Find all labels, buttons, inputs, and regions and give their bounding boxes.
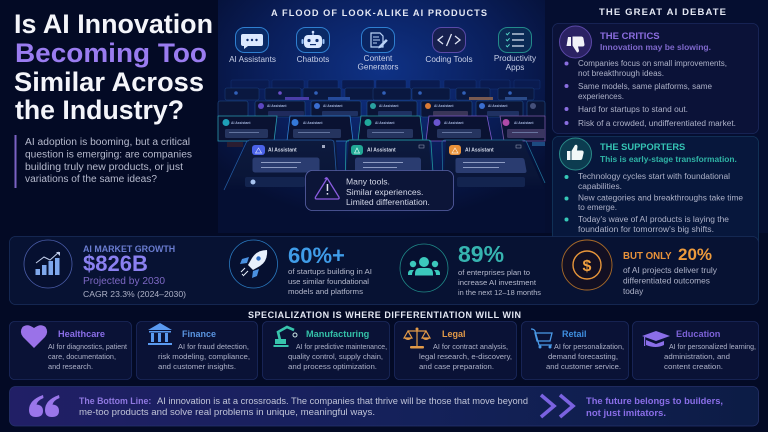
title: Becoming Too xyxy=(15,38,207,68)
second row of product cards: AI Assistant xyxy=(303,121,323,125)
label: content generators: Content xyxy=(364,54,393,63)
panel: healthcare: Healthcare xyxy=(58,329,105,339)
panel: legal xyxy=(394,322,516,380)
stat: only 20%: today xyxy=(623,286,644,296)
third row of product cards: AI Assistant xyxy=(434,104,454,108)
panel: the critics: THE CRITICS xyxy=(600,31,660,42)
panel: healthcare: care, documentation, xyxy=(48,352,116,361)
icon: content generators xyxy=(362,28,394,52)
panel: retail: AI for personalization, xyxy=(554,342,624,351)
stat: 60% startups: models and platforms xyxy=(288,287,363,296)
panel: legal: AI for contract analysis, xyxy=(433,342,508,351)
stat: 89% enterprises: of enterprises plan to xyxy=(458,268,530,277)
icon: chatbots xyxy=(296,28,330,52)
icon: chevrons xyxy=(541,395,573,417)
panel: the supporters: foundation for tomorrow's big shifts. xyxy=(578,225,714,234)
stat: 60% startups: of startups building in AI xyxy=(288,267,372,276)
panel: education: content creation. xyxy=(664,362,723,371)
icon: heart xyxy=(21,325,47,348)
third row of product cards: AI Assistant xyxy=(267,104,287,108)
icon: cart xyxy=(531,329,552,348)
intro text block: variations of the same ideas? xyxy=(25,174,157,185)
stat: 89% enterprises: in the next 12–18 months xyxy=(458,288,541,297)
heading: debate: THE GREAT AI DEBATE xyxy=(599,7,726,18)
panel: retail: demand forecasting, xyxy=(548,352,618,361)
front product card: teal xyxy=(345,140,433,190)
panel: finance xyxy=(136,322,258,380)
back rows of look-alike product cards xyxy=(225,80,540,100)
panel: the bottom line: me-too products and solve real problems in unique, meaningful ways. xyxy=(79,406,375,417)
panel: legal: and case preparation. xyxy=(419,362,494,371)
stat: 60% startups: use similar foundational xyxy=(288,277,369,286)
panel: manufacturing xyxy=(262,322,390,380)
panel: manufacturing: Manufacturing xyxy=(306,329,369,339)
panel: finance: and customer insights. xyxy=(158,362,236,371)
label: chatbots: Chatbots xyxy=(297,55,329,64)
callout: many tools: Similar experiences. xyxy=(346,187,423,197)
panel: finance: risk modeling, compliance, xyxy=(158,352,250,361)
stat: AI market growth: CAGR 23.3% (2024–2030) xyxy=(83,289,186,299)
intro text block: question is emerging: are companies xyxy=(25,150,192,160)
label: AI assistants: AI Assistants xyxy=(229,55,276,64)
panel: education xyxy=(632,322,758,380)
panel: the supporters: Technology cycles start with foundational xyxy=(578,172,730,181)
icon: robot arm xyxy=(274,327,297,347)
panel: education: AI for personalized learning, xyxy=(669,342,756,351)
panel: product flood background xyxy=(218,0,545,233)
heading: flood of products: A FLOOD OF LOOK-ALIKE AI PRODUCTS xyxy=(271,8,487,18)
second row of product cards: AI Assistant xyxy=(231,121,251,125)
second row of product cards: AI Assistant xyxy=(375,121,395,125)
front product card: teal: AI Assistant xyxy=(367,148,396,154)
second row of product cards: AI Assistant xyxy=(444,121,464,125)
label: content generators xyxy=(358,54,398,72)
icon: warning triangle xyxy=(315,178,339,199)
panel: the supporters xyxy=(552,136,758,246)
label: productivity apps: Apps xyxy=(506,63,524,72)
stat: 60% startups xyxy=(230,240,372,296)
panel: healthcare: and research. xyxy=(48,362,93,371)
title xyxy=(14,9,213,125)
panel: the supporters: New categories and breakthroughs take time xyxy=(578,194,744,202)
callout: many tools: Limited differentiation. xyxy=(346,197,430,207)
panel: finance: AI for fraud detection, xyxy=(178,342,249,351)
panel: debate background xyxy=(545,0,768,233)
stat: AI market growth: Projected by 2030 xyxy=(83,276,165,287)
front product card: blue xyxy=(224,140,339,190)
icon: AI assistants xyxy=(236,28,268,52)
panel: manufacturing: and process optimization. xyxy=(288,362,377,371)
panel: the bottom line: The future belongs to builders, xyxy=(586,396,723,406)
panel: the critics: Hard for startups to stand out. xyxy=(578,105,688,114)
front product card: orange xyxy=(442,140,545,190)
title: Is AI Innovation xyxy=(14,9,213,39)
stat: only 20%: differentiated outcomes xyxy=(623,276,710,286)
panel: education: Education xyxy=(676,329,721,339)
second row of product cards xyxy=(218,116,545,147)
icon: graduation cap xyxy=(642,331,670,347)
stat: 89% enterprises: 89% xyxy=(458,241,504,267)
intro text block: AI adoption is booming, but a critical xyxy=(25,137,190,148)
stat: 89% enterprises: increase AI investment xyxy=(458,278,537,287)
callout: many tools xyxy=(306,170,454,210)
third row of product cards: AI Assistant xyxy=(488,104,508,108)
panel: legal: legal research, e-discovery, xyxy=(419,352,512,361)
stat: only 20%: BUT ONLY xyxy=(623,251,672,262)
panel: manufacturing: AI for predictive maintenance, xyxy=(296,342,387,351)
panel: the bottom line: The Bottom Line: xyxy=(79,396,151,406)
panel: the supporters: This is early-stage transformation. xyxy=(600,154,737,164)
panel: the critics: not breakthrough ideas. xyxy=(578,69,664,78)
panel: the critics xyxy=(552,24,758,134)
title: Similar Across xyxy=(14,67,204,97)
stat: only 20% xyxy=(562,240,718,296)
icon: quotation marks xyxy=(29,395,60,417)
stat: AI market growth: $826B xyxy=(83,251,148,276)
icon: coding tools xyxy=(432,28,466,52)
panel: the critics: Risk of a crowded, undifferentiated market. xyxy=(578,119,736,128)
panel: market statistics xyxy=(10,236,758,304)
panel: legal: Legal xyxy=(442,329,466,339)
icon: productivity apps xyxy=(498,28,532,52)
panel: healthcare: AI for diagnostics, patient xyxy=(48,342,127,351)
panel: the supporters: THE SUPPORTERS xyxy=(600,142,685,152)
callout: many tools: Many tools. xyxy=(346,176,390,186)
label: content generators: Generators xyxy=(358,62,398,72)
panel: the bottom line xyxy=(10,386,758,426)
panel: the critics: Same models, same platforms, same xyxy=(578,82,713,91)
panel: the critics: experiences. xyxy=(578,92,624,101)
front product card: blue: AI Assistant xyxy=(268,148,297,154)
icon: thumbs down xyxy=(560,26,592,58)
panel: the supporters: capabilities. xyxy=(578,182,622,191)
third row of product cards xyxy=(218,101,545,117)
icon: scales xyxy=(404,328,430,348)
stat: AI market growth xyxy=(24,240,186,299)
panel: manufacturing: quality control, supply chain, xyxy=(288,352,383,361)
intro text block: building truly new products, or just xyxy=(25,162,183,173)
panel: the critics: Companies focus on small improvements, xyxy=(578,59,727,68)
front product card: orange: AI Assistant xyxy=(465,148,494,154)
second row of product cards: AI Assistant xyxy=(514,121,534,125)
icon: bank xyxy=(148,323,172,345)
third row of product cards: AI Assistant xyxy=(323,104,343,108)
icon: thumbs up xyxy=(560,138,592,170)
stat: AI market growth: AI MARKET GROWTH xyxy=(83,244,175,254)
title: the Industry? xyxy=(15,95,184,125)
panel: the bottom line: AI innovation is at a crossroads. The companies that thrive will be those that move beyond xyxy=(157,395,528,406)
third row of product cards: AI Assistant xyxy=(379,104,399,108)
panel: the critics: Innovation may be slowing. xyxy=(600,42,711,52)
panel: the bottom line: not just imitators. xyxy=(586,408,666,418)
stat: 60% startups: 60%+ xyxy=(288,243,345,268)
stat: only 20%: $ xyxy=(583,258,592,275)
stat: only 20%: 20% xyxy=(678,245,712,264)
panel: retail: and customer service. xyxy=(546,362,621,371)
intro text block xyxy=(14,135,192,188)
label: coding tools: Coding Tools xyxy=(425,55,473,64)
panel: the supporters: to emerge. xyxy=(578,203,617,212)
stat: only 20%: of AI projects deliver truly xyxy=(623,265,718,275)
panel: the supporters: Today's wave of AI products is laying the xyxy=(578,215,730,224)
label: productivity apps: Productivity xyxy=(494,54,537,63)
stat: 89% enterprises xyxy=(400,241,541,297)
label: productivity apps xyxy=(494,54,537,72)
panel: healthcare xyxy=(10,322,132,380)
panel: retail xyxy=(522,322,628,380)
panel: finance: Finance xyxy=(182,329,216,339)
panel: retail: Retail xyxy=(562,329,587,339)
heading: specialization: SPECIALIZATION IS WHERE DIFFERENTIATION WILL WIN xyxy=(248,310,521,320)
panel: education: administration, and xyxy=(664,352,730,361)
